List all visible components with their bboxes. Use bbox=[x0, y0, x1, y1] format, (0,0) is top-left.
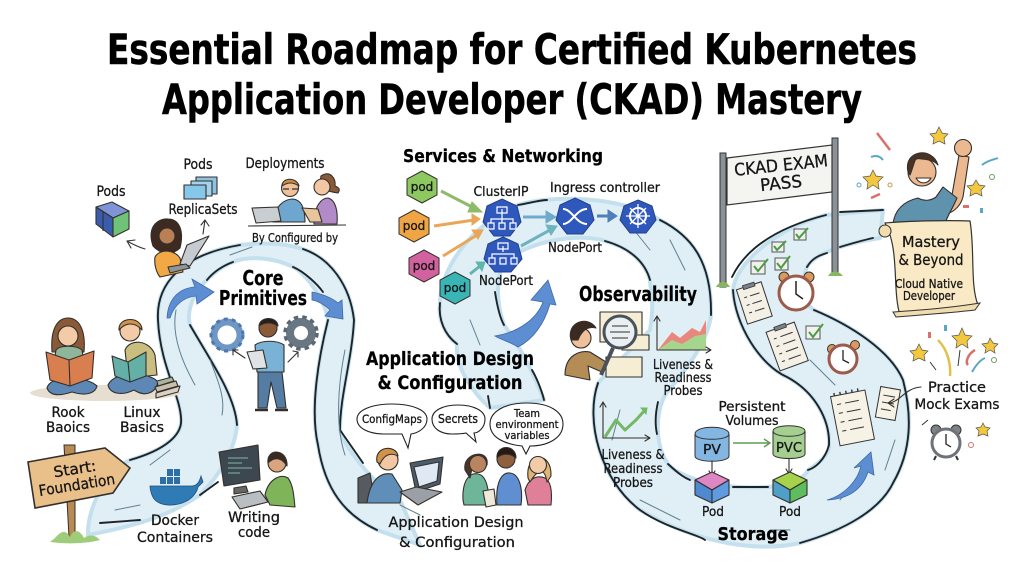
labels: networking: ClusterIP bbox=[474, 185, 529, 200]
start signpost bbox=[28, 445, 130, 543]
notepad bbox=[830, 387, 874, 446]
mastery scroll bbox=[879, 221, 980, 317]
person inspecting logs bbox=[565, 312, 649, 380]
label: Deployments: Deployments bbox=[246, 156, 324, 172]
blue arrow storage bbox=[827, 452, 874, 500]
icon: grey gear bbox=[285, 317, 317, 349]
label: Pods (cube): Pods bbox=[96, 184, 126, 200]
bubble: Team environment variables: environment bbox=[496, 418, 559, 431]
developer at laptop bbox=[358, 448, 443, 505]
alarm clock large bbox=[779, 272, 814, 310]
label: Application Design & Configuration (bottom) bbox=[388, 515, 524, 551]
bubble: ConfigMaps bbox=[357, 404, 427, 448]
bubble: Secrets: Secrets bbox=[438, 412, 478, 426]
icon: book stack bbox=[155, 377, 180, 398]
label: Writing code: code bbox=[238, 525, 270, 541]
service heptagons bbox=[483, 198, 656, 272]
icon: replica stack bbox=[184, 177, 217, 199]
heading: Application Design & Configuration bbox=[366, 348, 534, 394]
start signpost: Foundation bbox=[37, 470, 116, 500]
arrow PV to PVC bbox=[733, 439, 770, 447]
labels: Pod bbox=[702, 505, 801, 520]
label: Docker Containers: Docker bbox=[151, 513, 199, 529]
bubble: Team environment variables: Team bbox=[513, 407, 540, 420]
exam sign bbox=[716, 138, 843, 287]
mastery scroll: Developer bbox=[903, 289, 955, 303]
label: By Configured by: By Configured by bbox=[252, 230, 338, 245]
boy reading book bbox=[108, 320, 158, 394]
label: Writing code: Writing bbox=[228, 510, 280, 526]
mastery scroll: Mastery bbox=[902, 233, 960, 251]
pod hexagons: pod bbox=[413, 259, 435, 273]
label: Persistent Volumes: Volumes bbox=[726, 414, 779, 429]
confetti top bbox=[857, 127, 998, 213]
pod hexagons: pod bbox=[411, 180, 433, 194]
confetti practice bbox=[910, 325, 998, 448]
label: probes upper: Probes bbox=[664, 384, 703, 399]
labels: networking: NodePort bbox=[479, 274, 533, 289]
alarm clock medium bbox=[828, 340, 860, 373]
alarm clock grey bbox=[931, 425, 961, 460]
icon: PVC cylinder: PVC bbox=[776, 441, 802, 456]
checkmarks bbox=[751, 228, 823, 339]
label: Application Design & Configuration (bottom): & Configuration bbox=[399, 535, 515, 551]
label: Pods (stack): Pods bbox=[184, 157, 212, 173]
label: Practice Mock Exams: Practice bbox=[928, 380, 986, 396]
small note with pointer bbox=[875, 386, 900, 420]
pod hexagons bbox=[399, 171, 470, 304]
chart: line chart bbox=[600, 402, 650, 441]
heading: Core Primitives: Primitives bbox=[219, 286, 307, 310]
blue arrow into core bbox=[167, 279, 214, 318]
label: Linux Basics: Basics bbox=[120, 420, 164, 436]
champion figure bbox=[893, 140, 972, 224]
person with tablet bbox=[247, 318, 288, 410]
icon: PV cylinder bbox=[695, 427, 729, 461]
chart: area chart bbox=[654, 316, 711, 353]
bubble: Secrets bbox=[432, 405, 485, 442]
label: Writing code bbox=[228, 510, 280, 541]
icon: pod cube pink bbox=[695, 472, 729, 503]
labels: networking: NodePort bbox=[548, 241, 602, 256]
labels: Pod: Pod bbox=[702, 505, 724, 520]
pod hexagons: pod bbox=[403, 219, 425, 233]
label: Rook Baoics: Baoics bbox=[46, 420, 90, 436]
big blue arrow bbox=[495, 280, 556, 347]
clipboard 1 bbox=[736, 280, 772, 324]
arrows to pods bbox=[709, 459, 792, 476]
exam sign: PASS bbox=[759, 172, 803, 196]
labels: networking: Ingress controller bbox=[550, 181, 661, 196]
heading: Observability: Observability bbox=[579, 282, 697, 306]
label: Docker Containers: Containers bbox=[137, 530, 213, 546]
mastery scroll: & Beyond bbox=[898, 251, 964, 269]
bubble: Team environment variables: variables bbox=[504, 429, 550, 442]
computer with coder bbox=[219, 445, 295, 509]
labels: networking bbox=[474, 181, 661, 289]
girl reading book bbox=[46, 318, 97, 395]
heading: Services & Networking: Services & Networking bbox=[403, 146, 603, 167]
three teammates bbox=[463, 448, 551, 507]
label: probes lower bbox=[602, 448, 664, 491]
label: probes lower: Liveness & bbox=[602, 448, 664, 463]
readers ground bbox=[30, 385, 180, 401]
winding river path bbox=[88, 199, 909, 547]
arrow to pod cube bbox=[127, 240, 145, 249]
deployment team bbox=[248, 174, 346, 226]
river edge lines bbox=[100, 200, 909, 543]
heading: Application Design & Configuration: & Configuration bbox=[378, 372, 522, 394]
label: probes upper bbox=[653, 358, 713, 399]
clipboard 2 bbox=[765, 320, 808, 371]
label: Persistent Volumes bbox=[718, 400, 786, 429]
icon: PVC cylinder bbox=[773, 426, 805, 458]
heading: Application Design & Configuration: Application Design bbox=[366, 348, 534, 370]
person with laptop bbox=[151, 219, 209, 277]
mastery scroll: Cloud Native bbox=[895, 277, 963, 291]
label: Practice Mock Exams bbox=[914, 380, 1000, 413]
icon: PV cylinder: PV bbox=[703, 443, 721, 458]
labels: Pod: Pod bbox=[779, 505, 801, 520]
icon: docker whale bbox=[150, 469, 203, 505]
arrows from pods to services bbox=[434, 191, 617, 274]
label: Docker Containers bbox=[137, 513, 213, 546]
label: Rook Baoics: Rook bbox=[52, 405, 85, 421]
blue arrow out of core bbox=[312, 292, 343, 319]
bubble: ConfigMaps: ConfigMaps bbox=[362, 412, 422, 426]
label: Practice Mock Exams: Mock Exams bbox=[914, 397, 1000, 413]
heading: Core Primitives bbox=[219, 266, 307, 310]
heading: Storage: Storage bbox=[718, 524, 788, 545]
icon: pod cube green bbox=[773, 472, 807, 503]
label: probes upper: Liveness & bbox=[653, 358, 713, 373]
bubble: Team environment variables bbox=[490, 403, 563, 454]
label: probes lower: Probes bbox=[613, 476, 653, 491]
label: Rook Baoics bbox=[46, 405, 90, 436]
icon: blue gear bbox=[211, 319, 243, 351]
label: Persistent Volumes: Persistent bbox=[718, 400, 786, 415]
title bbox=[107, 25, 917, 124]
arrow to replicasets bbox=[201, 220, 209, 234]
callout arrow bbox=[888, 387, 921, 407]
label: probes lower: Readiness bbox=[604, 462, 663, 477]
label: Application Design & Configuration (bottom): Application Design bbox=[388, 515, 524, 531]
label: probes upper: Readiness bbox=[654, 371, 712, 386]
heading: Core Primitives: Core bbox=[242, 266, 284, 290]
label: Linux Basics bbox=[120, 405, 164, 436]
label: ReplicaSets: ReplicaSets bbox=[168, 202, 238, 218]
pod hexagons: pod bbox=[444, 281, 466, 295]
icon: pod cube bbox=[96, 202, 129, 237]
start signpost: Start: bbox=[52, 457, 97, 481]
arrows to gears bbox=[233, 350, 298, 362]
exam sign: CKAD EXAM bbox=[733, 151, 829, 181]
label: Linux Basics: Linux bbox=[124, 405, 160, 421]
